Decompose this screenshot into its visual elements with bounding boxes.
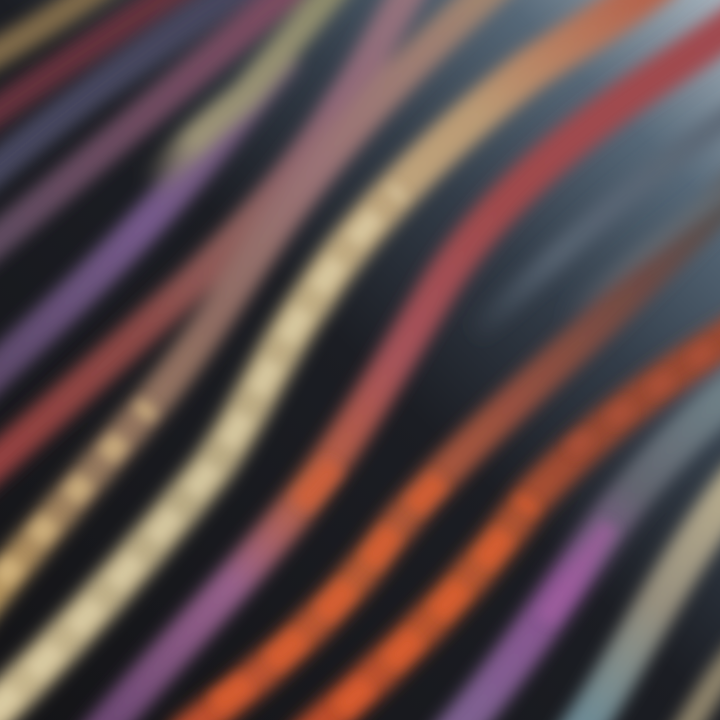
strand: tan to mauve [0, 0, 500, 620]
strand: purple lower [450, 385, 720, 720]
highlights: purple sheen [545, 525, 610, 620]
strand: pale lower right [575, 480, 720, 720]
highlights: orange beads lower [340, 500, 530, 710]
strand: orange lower [305, 330, 720, 720]
strand: left red to pink [0, 0, 415, 485]
highlights: orange beads middle [215, 470, 450, 705]
strand: left pink [0, 0, 290, 262]
highlights: cream beads [0, 190, 400, 715]
strand: top-left tan [0, 0, 110, 68]
strand: orange middle [185, 185, 720, 720]
strand: left purple [0, 60, 280, 395]
highlights: orange node [300, 465, 335, 505]
strand: grey right [560, 180, 720, 320]
highlights: right red beads [570, 345, 715, 450]
bead highlights [0, 190, 715, 715]
strand: upper-left red [0, 0, 190, 130]
strand: upper-left slate blue [0, 0, 250, 190]
highlights: left tan beads [0, 405, 150, 580]
strand: upper cream [150, 0, 340, 190]
strand: grey upper right [470, 110, 720, 340]
strand: far corner cream [680, 650, 720, 720]
